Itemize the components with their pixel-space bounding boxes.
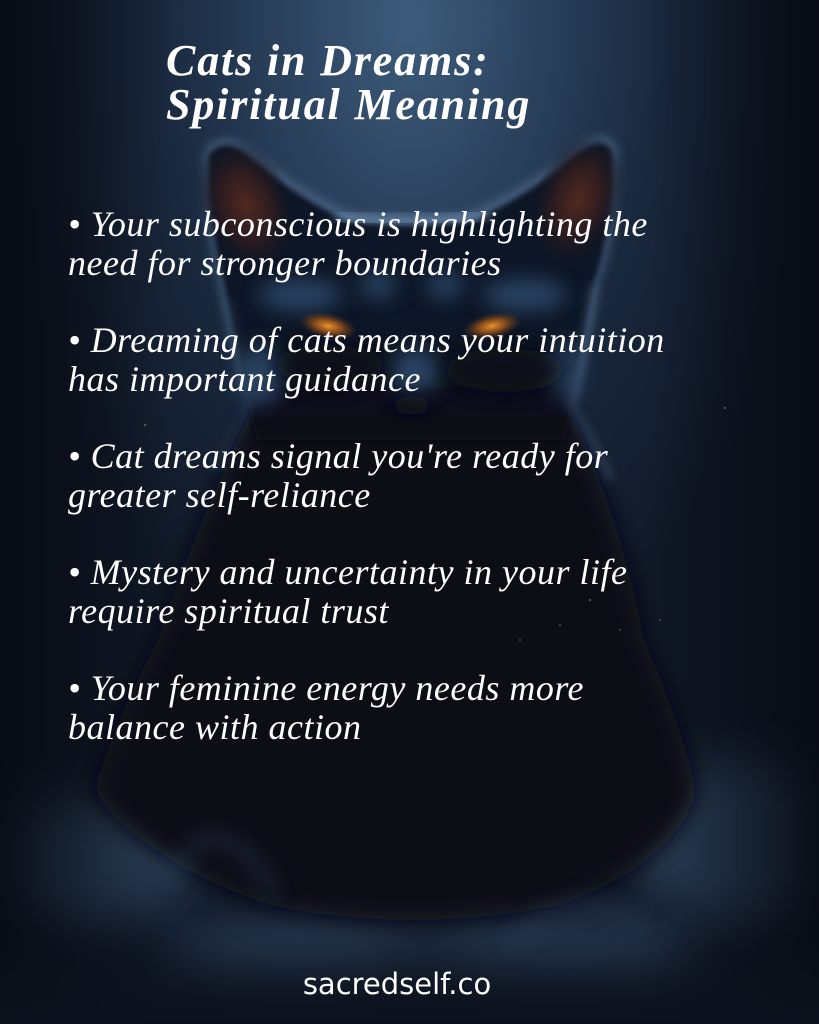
body xyxy=(94,402,696,920)
mist over body xyxy=(170,838,640,950)
bullet: intuition: • Dreaming of cats means your intuition xyxy=(68,320,665,360)
head xyxy=(209,144,612,440)
bullet: feminine energy: balance with action xyxy=(68,707,361,747)
cheek rims xyxy=(570,285,610,480)
bullet: spiritual trust xyxy=(68,552,627,631)
title xyxy=(166,36,531,129)
eyes xyxy=(296,307,360,345)
bullet: self-reliance: greater self-reliance xyxy=(68,475,371,515)
bullet: feminine energy: • Your feminine energy needs more xyxy=(68,668,584,708)
ear inner right xyxy=(513,121,643,279)
head rim light xyxy=(205,136,618,400)
bullet: self-reliance: • Cat dreams signal you're ready for xyxy=(68,436,608,476)
head top highlight xyxy=(335,214,490,221)
dark under-eye xyxy=(275,345,385,385)
bullet: spiritual trust: • Mystery and uncertainty in your life xyxy=(68,552,627,592)
face blue patches xyxy=(238,271,581,405)
bullet: spiritual trust: require spiritual trust xyxy=(68,591,389,631)
title: Cats in Dreams: xyxy=(166,36,490,85)
bullet: self-reliance xyxy=(68,436,608,515)
mist xyxy=(0,760,819,975)
cat xyxy=(94,121,696,920)
ear inner left xyxy=(178,125,314,285)
bullet: boundaries: need for stronger boundaries xyxy=(68,243,502,283)
nose xyxy=(390,395,434,415)
bullet: intuition: has important guidance xyxy=(68,359,421,399)
footer website: sacredself.co xyxy=(303,967,491,1001)
title: Spiritual Meaning xyxy=(166,80,531,129)
bullet: intuition xyxy=(68,320,665,399)
sparkles xyxy=(144,407,726,691)
bullet: boundaries xyxy=(68,204,648,283)
bullet: boundaries: • Your subconscious is highlighting the xyxy=(68,204,648,244)
bullet: feminine energy xyxy=(68,668,584,747)
